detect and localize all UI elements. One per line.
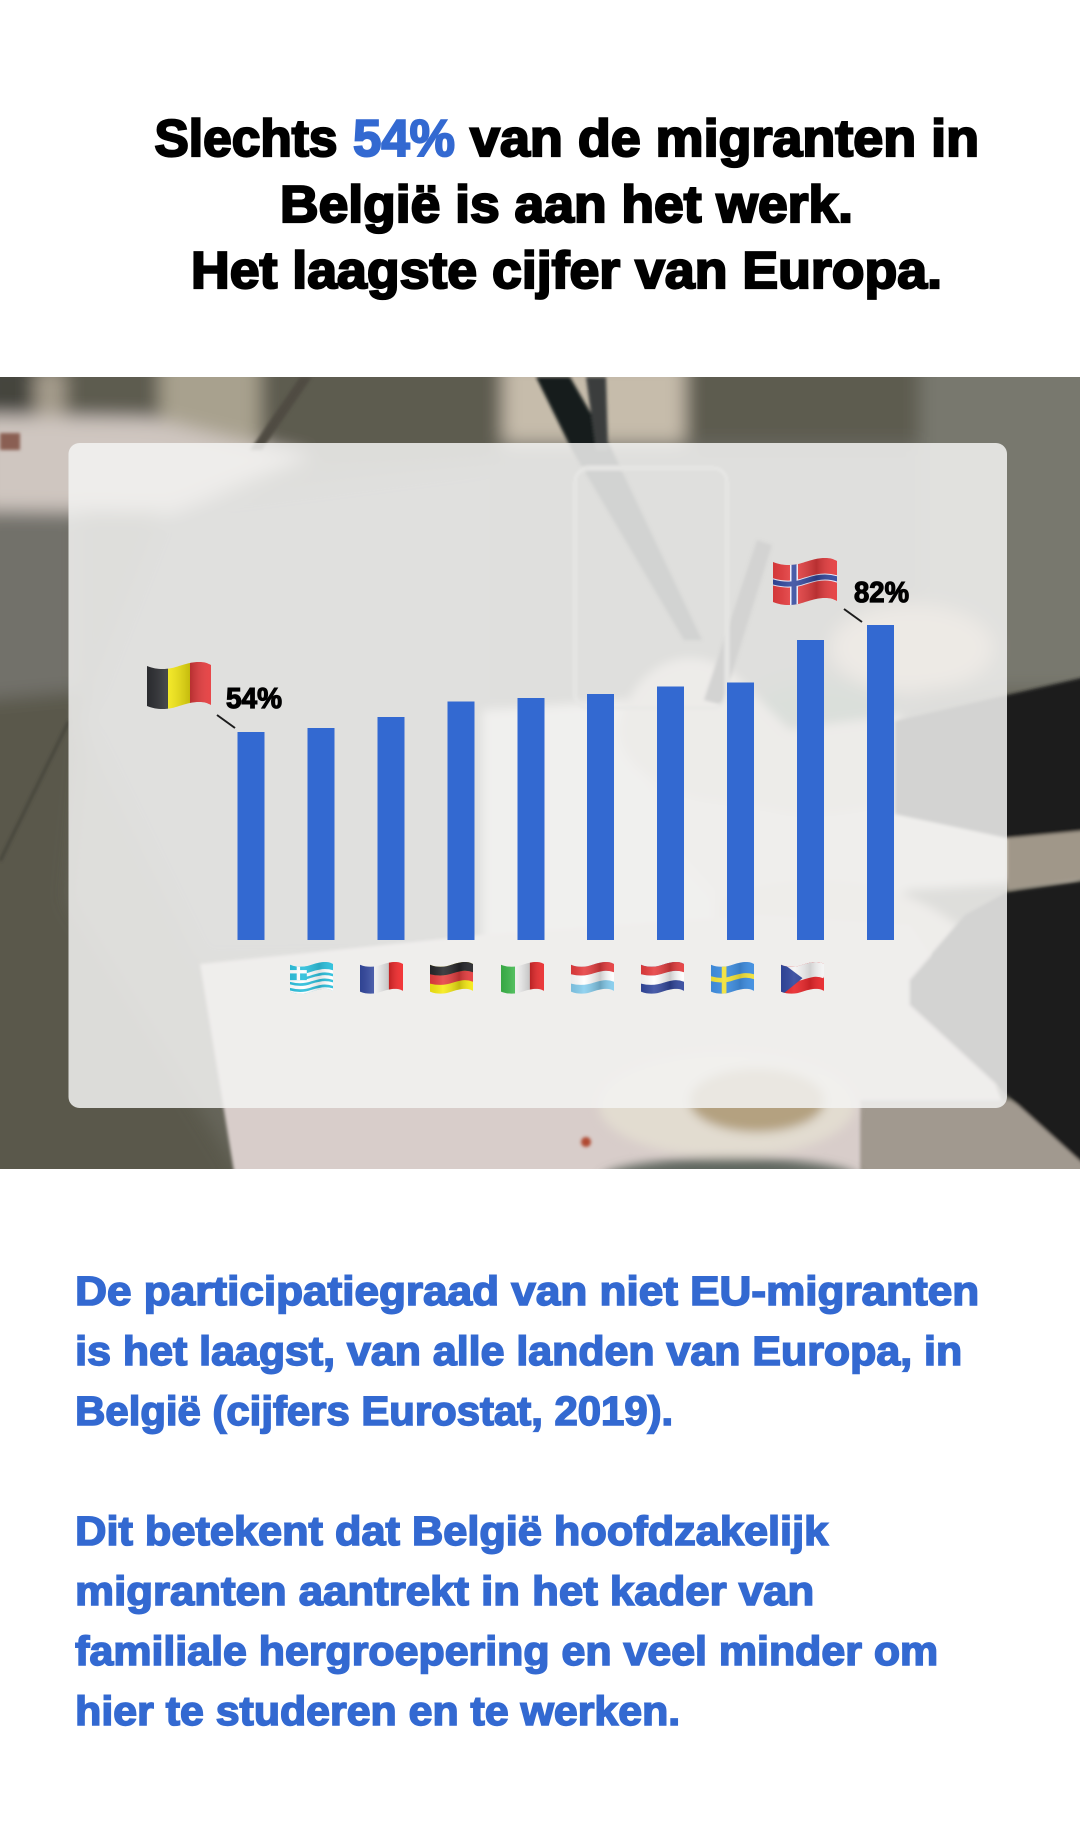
icon: Luxembourg flag (571, 962, 614, 994)
bar: Luxembourg (587, 694, 614, 940)
bar: Italy (518, 698, 544, 940)
callout: 54% Belgium: 54% (226, 683, 282, 715)
icon: French flag (360, 962, 403, 996)
text block: meaning: Dit betekent dat België hoofdzakelijk (75, 1508, 828, 1554)
bar: Norway 82% (867, 625, 894, 940)
title: België is aan het werk. (280, 176, 853, 234)
text block: meaning: migranten aantrekt in het kader van (75, 1568, 814, 1614)
bar: Sweden (727, 682, 754, 940)
title: Slechts (154, 110, 338, 168)
text block: participation rate: België (cijfers Eurostat, 2019). (75, 1388, 673, 1434)
icon: Czech flag (781, 962, 824, 994)
text block: participation rate: is het laagst, van alle landen van Europa, in (75, 1328, 962, 1374)
text block: meaning: hier te studeren en te werken. (75, 1688, 680, 1734)
icon: Swedish flag (711, 962, 754, 994)
text block: meaning: familiale hergroepering en veel minder om (75, 1628, 938, 1674)
bar: Belgium 54% (238, 732, 264, 940)
title (154, 110, 979, 300)
translucent chart panel (68, 443, 1007, 1108)
icon: German flag (430, 962, 473, 994)
callout: 82% Norway: 82% (854, 577, 909, 609)
text block: meaning (75, 1508, 938, 1734)
highlighted percentage: 54% (353, 110, 455, 168)
text block: participation rate: De participatiegraad van niet EU-migranten (75, 1268, 979, 1314)
bar: Greece (308, 728, 334, 940)
bar chart (238, 625, 894, 940)
icon: Belgian flag (147, 662, 211, 712)
country flags row (288, 962, 826, 996)
bar: France (378, 717, 404, 940)
text block: participation rate (75, 1268, 979, 1434)
bar: Netherlands (657, 686, 684, 940)
title: van de migranten in (470, 110, 979, 168)
icon: Italian flag (501, 962, 544, 996)
title: Het laagste cijfer van Europa. (191, 242, 942, 300)
bar: Germany (448, 702, 474, 940)
icon: Norwegian flag (773, 558, 837, 605)
icon: Greek flag (290, 962, 333, 994)
icon: Dutch flag (641, 962, 684, 994)
background photo: desk with writing hand (0, 360, 1080, 1202)
callout: 54% Belgium (217, 683, 282, 728)
callout: 82% Norway (844, 577, 909, 622)
bar: Czechia (797, 640, 824, 940)
